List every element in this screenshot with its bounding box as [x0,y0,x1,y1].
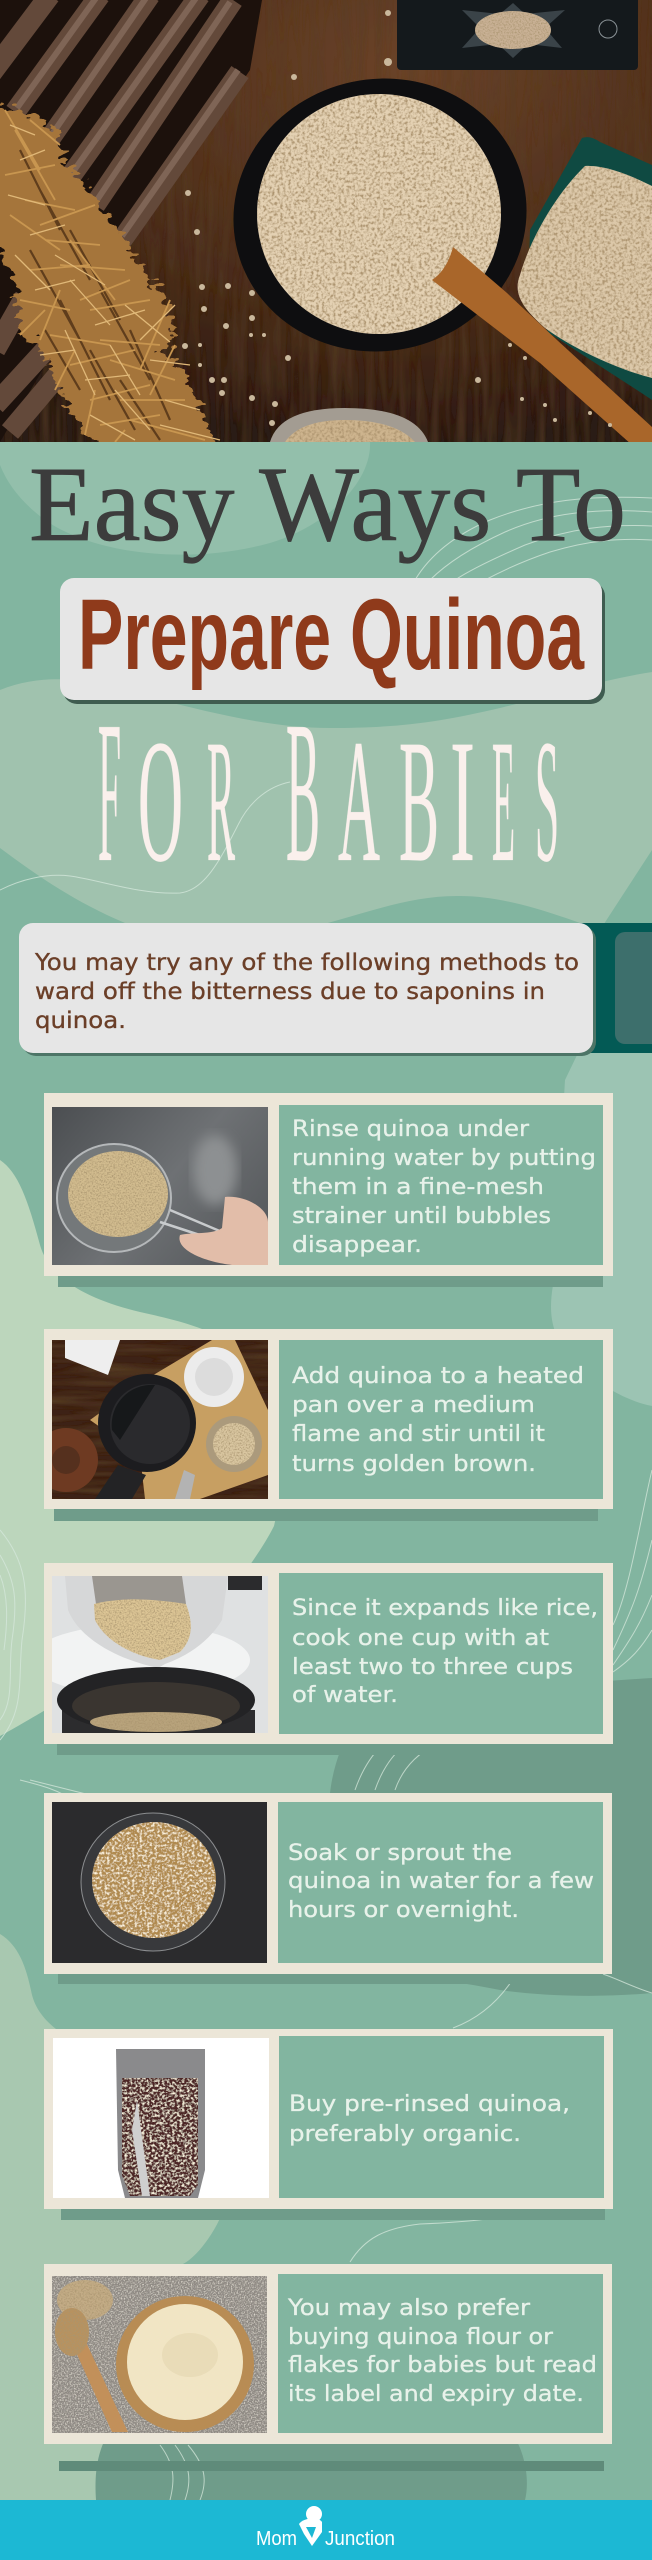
intro callout: You may try any of the following methods to [34,950,579,976]
card 3: cook: of water. [292,1682,398,1708]
card 6: flour or flakes: flakes for babies but read [288,2352,597,2378]
decorative thin lines [0,497,652,2500]
card 6: flour or flakes: buying quinoa flour or [288,2324,554,2350]
title line: For Babies: E [492,704,515,899]
small bowl [270,408,428,442]
footer: MomJunction logo [0,2500,652,2560]
scattered grains [182,10,612,427]
photo: flour bowl and spoon [52,2276,267,2433]
title line: For Babies: R [207,704,235,899]
card 3: cook: least two to three cups [292,1654,573,1680]
title line: For Babies: A [338,704,380,899]
photo: pouring quinoa into pot [52,1576,268,1733]
card 4: soak: Soak or sprout the [288,1840,512,1866]
wooden spoon [432,247,652,445]
card 5: pre-rinsed: preferably organic. [289,2121,521,2147]
card 5: pre-rinsed [44,2029,613,2220]
card 2: toast [34,1329,613,1521]
teal dish with quinoa [518,137,652,400]
card 1: rinse [44,1093,613,1287]
card 3: cook: Since it expands like rice, [292,1595,598,1621]
photo: pan on wooden board [52,1340,268,1499]
photo: rinsing in strainer [52,1107,268,1265]
photo: quinoa bag [53,2038,269,2198]
footer: MomJunction logo: Junction [325,2528,395,2550]
card 1: rinse: Rinse quinoa under [292,1116,530,1142]
text: S [535,704,559,899]
title line: For Babies [98,679,559,904]
intro callout [19,923,652,1056]
footer: MomJunction logo: Mom [256,2528,297,2550]
card 6: flour or flakes [44,2264,612,2471]
title line: For Babies: B [286,679,320,904]
title line: For Babies: F [98,679,121,904]
black bowl and quinoa [208,51,552,379]
card 2: toast: Add quinoa to a heated [292,1363,584,1389]
pampas plume [0,105,220,450]
black product box [397,0,638,70]
card 4: soak: hours or overnight. [288,1897,519,1923]
card 6: flour or flakes: its label and expiry date. [288,2381,584,2407]
card 2: toast: pan over a medium [292,1392,535,1418]
title line: For Babies: O [138,704,183,899]
wooden slats [0,0,262,442]
card 3: cook [30,1563,613,1755]
card 1: rinse: running water by putting [292,1145,596,1171]
title line: Easy Ways To: Easy Ways To [29,446,626,564]
card 1: rinse: strainer until bubbles [292,1203,551,1229]
title line: For Babies: B [399,704,439,899]
card 2: toast: flame and stir until it [292,1421,545,1447]
card 1: rinse: them in a fine-mesh [292,1174,544,1200]
card 1: rinse: disappear. [292,1232,422,1258]
card 4: soak [44,1793,612,1984]
intro callout: ward off the bitterness due to saponins in [35,979,545,1005]
card 4: soak: quinoa in water for a few [288,1868,594,1894]
hero photo: quinoa in bowls on wooden table [0,0,652,450]
card 2: toast: turns golden brown. [292,1451,536,1477]
card 5: pre-rinsed: Buy pre-rinsed quinoa, [289,2091,570,2117]
intro callout: quinoa. [35,1008,126,1034]
photo: plate on dark surface [52,1802,267,1963]
card 3: cook: cook one cup with at [292,1625,549,1651]
card 6: flour or flakes: You may also prefer [287,2295,531,2321]
title line: For Babies: I [450,704,475,899]
